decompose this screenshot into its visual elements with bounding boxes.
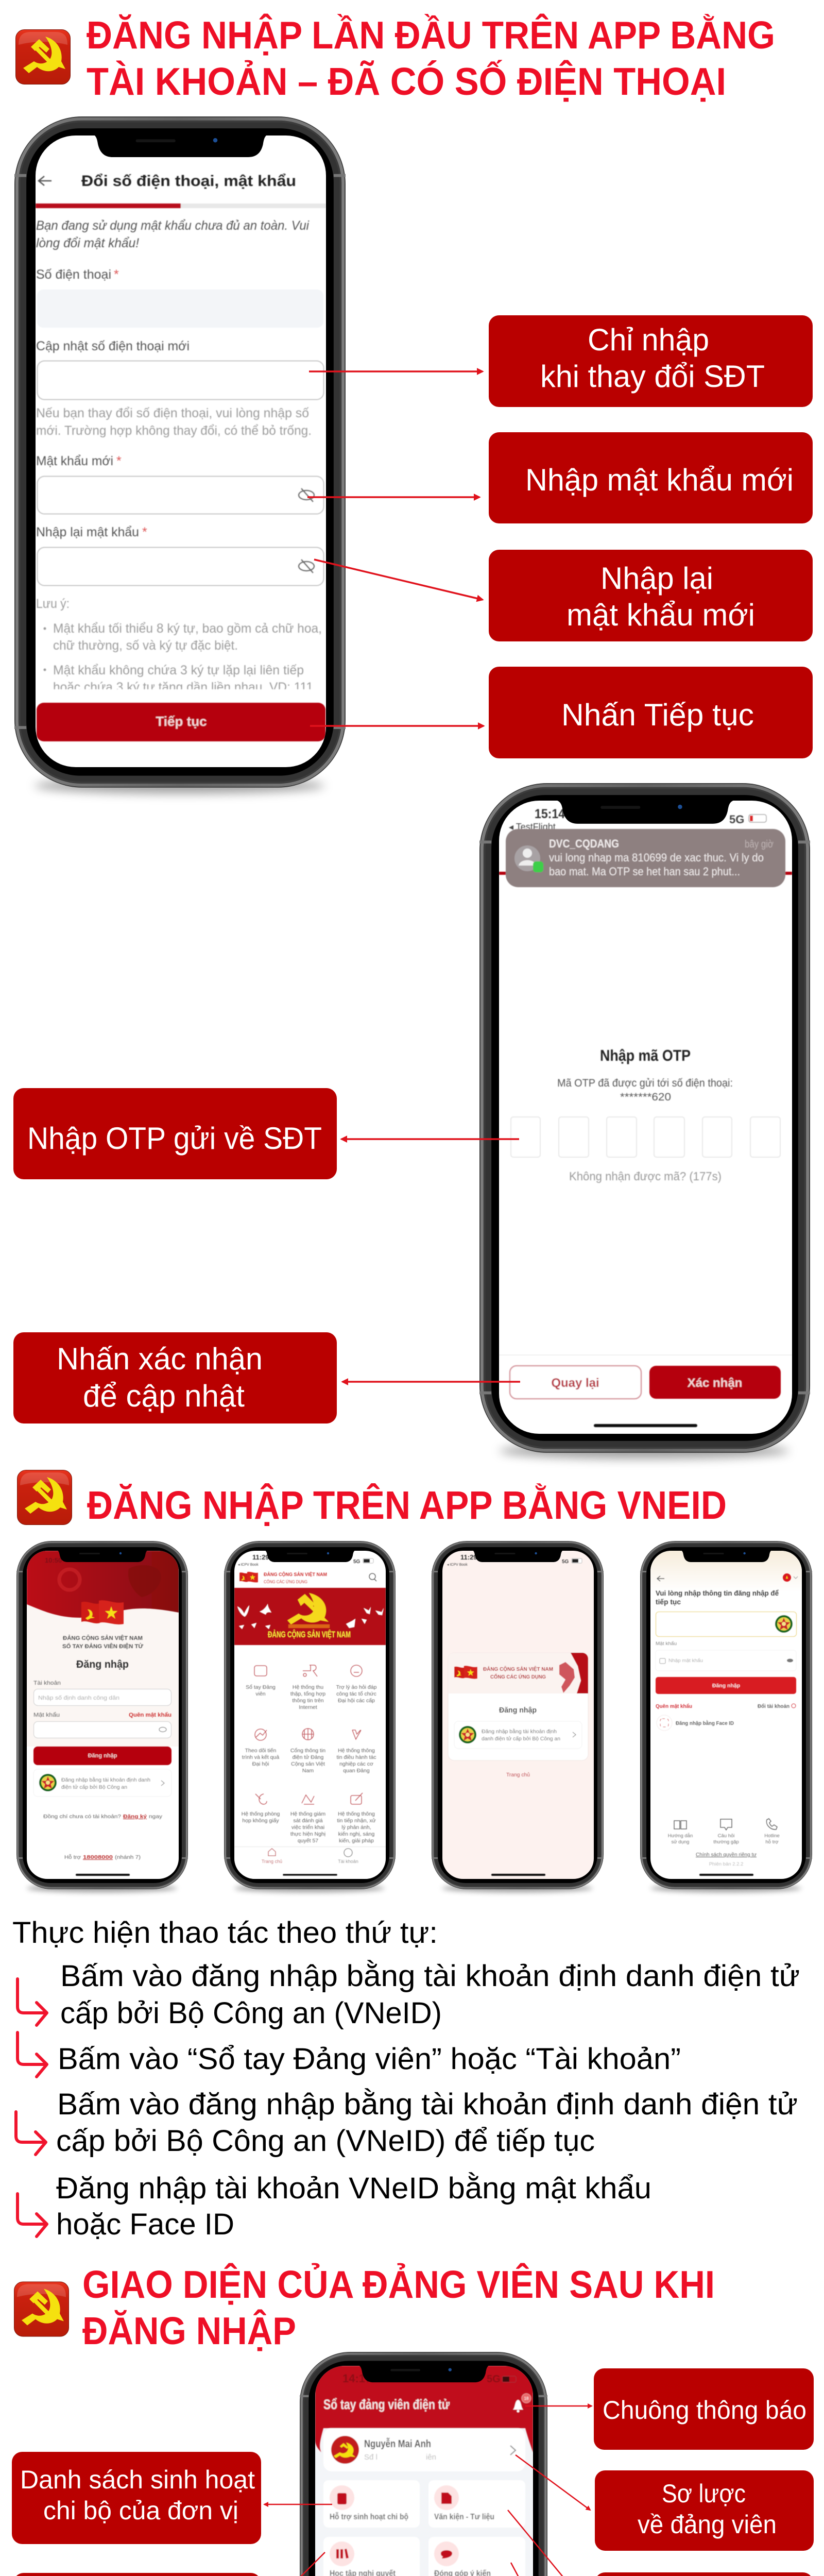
sign-up prompt: Đăng ký xyxy=(123,1814,147,1820)
step 3: cấp bởi Bộ Công an (VNeID) để tiếp tục xyxy=(56,2124,595,2158)
menu grid labels: họp không giấy xyxy=(242,1818,279,1824)
VNeID login row: Đăng nhập bằng tài khoản định danh xyxy=(61,1776,150,1783)
security notice: lòng đổi mật khẩu! xyxy=(36,236,139,250)
icon: notification bell: 18 xyxy=(524,2396,529,2401)
menu grid labels: tin điều hành tác xyxy=(336,1754,376,1760)
arrow: to repeat password callout xyxy=(314,560,483,600)
menu grid labels: quan Đảng xyxy=(343,1768,370,1774)
status bar: 15:14 xyxy=(535,807,565,821)
icon: party emblem xyxy=(15,30,70,84)
portal header: ĐẢNG CỘNG SẢN VIỆT NAM xyxy=(264,1571,327,1578)
phone: VNeID credentials screen xyxy=(640,1541,812,1892)
field: phone number xyxy=(36,267,323,328)
divider xyxy=(499,1354,792,1355)
arrow: to new password callout xyxy=(307,496,479,498)
status bar: 5G xyxy=(353,1559,360,1565)
step 3 xyxy=(16,2088,798,2158)
login card: CỔNG CÁC ỨNG DỤNG xyxy=(490,1673,546,1680)
arrow: to confirm callout xyxy=(342,1381,520,1383)
tile: branch activities: Hỗ trợ sinh hoạt chi bộ xyxy=(330,2513,408,2521)
icon: contact avatar xyxy=(514,845,543,872)
callout: confirm update xyxy=(13,1332,337,1423)
login card: Đăng nhập xyxy=(499,1706,537,1715)
form heading: tiếp tục xyxy=(656,1598,681,1606)
red banner xyxy=(234,1588,386,1645)
privacy and version: Chính sách quyền riêng tư xyxy=(696,1852,757,1858)
member card: Nguyễn Mai Anh xyxy=(364,2437,431,2450)
login card: danh điện tử cấp bởi Bộ Công an xyxy=(482,1736,560,1742)
step 4: hoặc Face ID xyxy=(56,2208,234,2241)
menu grid labels: nghiệp các cơ xyxy=(339,1761,373,1767)
security notice xyxy=(36,218,310,250)
field: new password xyxy=(36,454,323,514)
callout: party documents xyxy=(595,2572,813,2576)
tile: documents xyxy=(428,2480,525,2528)
phone: app portal screen xyxy=(224,1541,396,1892)
field: phone number: Số điện thoại xyxy=(36,267,111,282)
status bar xyxy=(238,1553,373,1567)
OTP description: Mã OTP đã được gửi tới số điện thoại: xyxy=(557,1077,733,1089)
field: repeat password: * xyxy=(142,525,147,539)
member card: Sđ l xyxy=(364,2453,377,2462)
icon: party emblem xyxy=(14,2282,69,2336)
status bar: 5G xyxy=(729,813,744,826)
menu grid labels: thập, tổng hợp xyxy=(290,1691,325,1697)
bottom tab bar xyxy=(234,1846,386,1879)
callout: resolution study list xyxy=(13,2573,261,2576)
home indicator xyxy=(283,1874,337,1876)
screen title: Sổ tay đảng viên điện tử xyxy=(323,2397,450,2412)
button: back xyxy=(510,1366,641,1399)
login button xyxy=(33,1747,171,1765)
red wave header xyxy=(27,1551,179,1618)
password field xyxy=(33,1712,171,1738)
arrow: documents xyxy=(508,2510,591,2576)
button: back: Quay lại xyxy=(551,1376,599,1390)
home link: Trang chủ xyxy=(506,1772,530,1778)
section heading: first login xyxy=(15,13,775,103)
step 4: Đăng nhập tài khoản VNeID bằng mật khẩu xyxy=(56,2172,651,2205)
button: confirm xyxy=(649,1366,781,1399)
login card xyxy=(448,1653,588,1760)
icon: notification bell xyxy=(513,2394,531,2412)
menu grid labels: kiến nghị, sáng xyxy=(338,1831,374,1837)
status bar: 5G xyxy=(487,2374,501,2385)
menu grid labels: Hệ thống thu xyxy=(293,1684,323,1690)
icon: step arrow xyxy=(18,1979,47,2025)
screen content xyxy=(315,2366,533,2576)
Face ID login: Đăng nhập bằng Face ID xyxy=(676,1720,734,1726)
callout: enter OTP xyxy=(13,1088,337,1179)
portal header: CỔNG CÁC ỨNG DỤNG xyxy=(264,1580,307,1584)
status bar xyxy=(342,2372,516,2385)
icon: step arrow xyxy=(16,2112,46,2155)
app name: SỔ TAY ĐẢNG VIÊN ĐIỆN TỬ xyxy=(62,1643,144,1650)
step 2 xyxy=(18,2032,681,2077)
field: repeat password: Nhập lại mật khẩu xyxy=(36,525,139,539)
screen content xyxy=(650,1551,802,1879)
login button xyxy=(656,1677,796,1694)
menu grid labels: Theo dõi tiến xyxy=(245,1748,276,1754)
sign-up prompt: Đồng chí chưa có tài khoản? xyxy=(43,1814,121,1820)
menu grid labels: công tác tổ chức xyxy=(336,1691,376,1697)
step 1: Bấm vào đăng nhập bằng tài khoản định danh điện tử xyxy=(60,1959,800,1993)
OTP input boxes xyxy=(511,1117,780,1157)
bottom tab bar: Trang chủ xyxy=(262,1859,282,1864)
menu grid labels: Nam xyxy=(302,1768,314,1774)
notes: Mật khẩu tối thiểu 8 ký tự, bao gồm cả chữ hoa, xyxy=(53,621,322,636)
help links: thường gặp xyxy=(713,1839,739,1845)
step 4 xyxy=(18,2172,651,2241)
phone: member home screen xyxy=(300,2352,547,2576)
menu grid labels: điện tử Đảng xyxy=(293,1754,324,1760)
menu grid labels: việc triển khai xyxy=(291,1824,324,1831)
menu grid labels: Đại hội xyxy=(252,1761,269,1767)
callout: repeat password xyxy=(489,550,813,641)
screen content xyxy=(27,1551,179,1879)
title line 2: TÀI KHOẢN – ĐÃ CÓ SỐ ĐIỆN THOẠI xyxy=(87,60,726,103)
password input xyxy=(656,1641,796,1671)
screen content xyxy=(499,801,792,1434)
helper text: mới. Trường hợp không thay đổi, có thể bỏ trống. xyxy=(36,423,312,438)
OTP heading: Nhập mã OTP xyxy=(600,1046,691,1064)
helper text: Nếu bạn thay đổi số điện thoại, vui lòng nhập số xyxy=(36,406,309,420)
red header xyxy=(315,2366,533,2452)
menu grid labels: lý phản ánh, xyxy=(341,1824,371,1831)
account field xyxy=(33,1680,171,1705)
password field: Mật khẩu xyxy=(33,1712,60,1718)
title: ĐĂNG NHẬP TRÊN APP BẰNG VNEID xyxy=(87,1483,727,1528)
tile: resolutions xyxy=(323,2537,420,2576)
status bar: ◂ ICPV Book xyxy=(447,1563,468,1567)
arrow: resolutions xyxy=(264,2552,325,2576)
home indicator xyxy=(699,1874,753,1876)
callout: branch activity list: Danh sách sinh hoạt xyxy=(20,2465,255,2494)
app name xyxy=(62,1635,144,1650)
help links: Hướng dẫn xyxy=(668,1833,693,1839)
callout: new phone number xyxy=(489,315,813,407)
faint emblem and portrait xyxy=(59,1565,161,1597)
security notice: Bạn đang sử dụng mật khẩu chưa đủ an toàn. Vui xyxy=(36,218,310,233)
menu grid labels: kiến, giải pháp xyxy=(339,1838,374,1844)
tile: documents: Văn kiện - Tư liệu xyxy=(434,2513,494,2521)
forgot password and switch account: Quên mật khẩu xyxy=(656,1703,692,1709)
banner title: ĐẢNG CỘNG SẢN VIỆT NAM xyxy=(268,1630,351,1639)
member card: iên xyxy=(426,2453,436,2462)
login button: Đăng nhập xyxy=(712,1683,740,1689)
field: repeat password xyxy=(36,525,323,585)
login heading: Đăng nhập xyxy=(76,1659,129,1670)
icon: back arrow xyxy=(39,176,52,185)
help links xyxy=(668,1819,780,1845)
support line: (nhánh 7) xyxy=(115,1854,141,1860)
field: new password: Mật khẩu mới xyxy=(36,454,113,468)
phone: handbook login screen xyxy=(432,1541,604,1892)
screen content xyxy=(36,135,326,767)
menu grid labels: sát đánh giá xyxy=(293,1818,323,1824)
arrow: member profile xyxy=(516,2455,590,2510)
section heading: member interface xyxy=(14,2263,715,2352)
callout: notification bell xyxy=(594,2368,814,2450)
Face ID login xyxy=(657,1715,734,1731)
login card: Đăng nhập bằng tài khoản định xyxy=(482,1728,557,1735)
form heading xyxy=(656,1589,779,1606)
menu grid labels: tin tiếp nhận, xử xyxy=(337,1818,376,1824)
phone: OTP screen xyxy=(479,783,810,1459)
menu grid labels: Trợ lý ảo hỏi đáp xyxy=(336,1684,376,1690)
account field: Tài khoản xyxy=(33,1680,61,1686)
step 3: Bấm vào đăng nhập bằng tài khoản định danh điện tử xyxy=(57,2088,798,2121)
account input xyxy=(656,1612,796,1636)
arrow: bell xyxy=(525,2405,592,2406)
phone: login screen xyxy=(16,1541,188,1892)
arrow: to continue callout xyxy=(310,725,484,727)
status bar: 11:29 xyxy=(460,1553,477,1561)
login button: Đăng nhập xyxy=(88,1753,117,1759)
menu grid labels: viên xyxy=(255,1691,266,1697)
OTP description: *******620 xyxy=(620,1091,671,1103)
menu grid labels: Đại hội các cấp xyxy=(338,1698,375,1704)
OTP description xyxy=(557,1077,733,1103)
portal header xyxy=(239,1571,376,1584)
notification card: vui long nhap ma 810699 de xac thuc. Vi ly do xyxy=(549,851,764,864)
title line 1: ĐĂNG NHẬP LẦN ĐẦU TRÊN APP BẰNG xyxy=(87,13,775,57)
arrow: to new phone callout xyxy=(309,370,483,372)
privacy and version xyxy=(696,1852,757,1867)
status bar: ◂ TestFlight xyxy=(509,822,556,832)
callout: press continue xyxy=(489,667,813,758)
tile: feedback xyxy=(428,2537,525,2576)
field: new phone number xyxy=(36,339,323,400)
menu grid labels xyxy=(242,1684,377,1844)
button: confirm: Xác nhận xyxy=(688,1376,742,1390)
notes: Lưu ý: xyxy=(36,597,70,611)
home indicator xyxy=(76,1874,130,1876)
field: new phone number: Cập nhật số điện thoại mới xyxy=(36,339,190,353)
callout: confirm update: Nhấn xác nhận xyxy=(57,1342,263,1376)
callout: new password: Nhập mật khẩu mới xyxy=(525,463,794,497)
help links: sử dụng xyxy=(672,1839,689,1845)
notes: chữ thường, số và ký tự đặc biệt. xyxy=(53,638,238,653)
sign-up prompt: ngay xyxy=(149,1814,163,1820)
app name: ĐẢNG CỘNG SẢN VIỆT NAM xyxy=(63,1635,143,1641)
callout: confirm update: để cập nhật xyxy=(83,1379,245,1413)
card banner xyxy=(448,1653,588,1693)
status bar: 5G xyxy=(562,1559,569,1565)
callout: repeat password: mật khẩu mới xyxy=(566,598,755,632)
section heading: VNeID login xyxy=(18,1470,727,1528)
menu grid labels: Hệ thống phòng xyxy=(242,1811,280,1817)
menu grid labels: Hệ thống giám xyxy=(290,1811,325,1817)
arrow: branch activities xyxy=(264,2504,332,2505)
menu grid labels: thông tin trên xyxy=(292,1698,324,1704)
menu grid labels: thực hiện Nghị xyxy=(290,1831,325,1837)
helper text xyxy=(36,406,312,438)
flags xyxy=(81,1600,124,1624)
field: phone number: * xyxy=(114,267,119,282)
notification card xyxy=(506,829,785,887)
callout: member profile: về đảng viên xyxy=(638,2510,777,2539)
birds xyxy=(237,1604,384,1629)
form heading: Vui lòng nhập thông tin đăng nhập để xyxy=(656,1589,779,1597)
help links: hỗ trợ xyxy=(765,1839,779,1845)
screen content xyxy=(442,1551,594,1879)
callout: enter OTP: Nhập OTP gửi về SĐT xyxy=(27,1121,322,1156)
icon: party emblem xyxy=(18,1470,72,1525)
callout: new password xyxy=(489,432,813,523)
password input: Mật khẩu xyxy=(656,1641,677,1647)
tile: branch activities xyxy=(323,2480,420,2528)
callout: notification bell: Chuông thông báo xyxy=(603,2396,806,2425)
screen content xyxy=(234,1551,386,1879)
back arrow and language flag xyxy=(657,1573,798,1582)
button: continue: Tiếp tục xyxy=(156,714,207,729)
VNeID login row: điện tử cấp bởi Bộ Công an xyxy=(61,1784,127,1790)
phone: change phone number and password screen xyxy=(14,116,346,793)
help links: Hotline xyxy=(764,1833,780,1839)
callout: new phone number: khi thay đổi SĐT xyxy=(540,359,765,394)
menu grid labels: trình và kết quả xyxy=(242,1754,279,1760)
screen title: Đổi số điện thoại, mật khẩu xyxy=(81,173,296,190)
support line xyxy=(64,1854,141,1860)
callout: member profile xyxy=(595,2470,814,2551)
icon: step arrow xyxy=(18,2032,47,2077)
notes: Mật khẩu không chứa 3 ký tự lặp lại liên tiếp xyxy=(53,663,304,677)
arrow: to OTP callout xyxy=(341,1138,519,1140)
step 1 xyxy=(18,1959,800,2030)
instructions intro: Thực hiện thao tác theo thứ tự: xyxy=(12,1916,438,1950)
status bar: 14:17 xyxy=(342,2372,371,2385)
sign-up prompt xyxy=(43,1814,163,1820)
support line: 18008000 xyxy=(83,1854,113,1860)
VNeID login row xyxy=(33,1769,171,1797)
notes: hoặc chứa 3 ký tự tăng dần liền nhau. VD: 111 xyxy=(53,680,313,694)
status bar xyxy=(509,808,767,831)
privacy and version: Phiên bản 2.2.2 xyxy=(709,1861,743,1867)
title line 1: GIAO DIỆN CỦA ĐẢNG VIÊN SAU KHI xyxy=(82,2263,715,2306)
status bar: 11:29 xyxy=(252,1553,269,1561)
progress bar xyxy=(36,204,326,208)
help links: Câu hỏi xyxy=(718,1833,734,1839)
resend countdown: Không nhận được mã? (177s) xyxy=(569,1170,722,1183)
callout: branch activity list: chi bộ của đơn vị xyxy=(43,2496,238,2525)
home indicator xyxy=(491,1874,545,1876)
account field: Nhập số định danh công dân xyxy=(38,1695,119,1701)
status bar: ◂ ICPV Book xyxy=(238,1563,259,1567)
title line 2: ĐĂNG NHẬP xyxy=(82,2309,296,2352)
callout: branch activity list xyxy=(12,2452,261,2544)
password input: Nhập mật khẩu xyxy=(668,1658,703,1664)
menu grid labels: Sổ tay Đảng xyxy=(246,1684,276,1690)
forgot password and switch account xyxy=(656,1703,796,1709)
menu grid labels: Cổng thông tin xyxy=(290,1748,325,1754)
callout: repeat password: Nhập lại xyxy=(600,561,713,596)
callout: new phone number: Chỉ nhập xyxy=(588,323,709,357)
member card xyxy=(323,2428,525,2471)
login card: ĐẢNG CỘNG SẢN VIỆT NAM xyxy=(483,1666,553,1672)
notification card: bao mat. Ma OTP se het han sau 2 phut... xyxy=(549,865,740,878)
notes xyxy=(36,597,326,694)
step 1: cấp bởi Bộ Công an (VNeID) xyxy=(60,1996,442,2030)
callout: member profile: Sơ lược xyxy=(662,2479,746,2508)
menu grid icons xyxy=(254,1665,363,1804)
bottom tab bar: Tài khoản xyxy=(338,1859,358,1864)
field: new password: * xyxy=(116,454,122,468)
menu grid labels: Cộng sản Việt xyxy=(291,1761,325,1767)
notification card: DVC_CQDANG xyxy=(549,837,619,850)
menu grid labels: Hệ thống thông xyxy=(338,1811,375,1817)
status time: 10:50 xyxy=(45,1556,62,1564)
password field: Quên mật khẩu xyxy=(129,1712,171,1718)
support line: Hỗ trợ xyxy=(64,1854,81,1860)
icon: step arrow xyxy=(18,2194,47,2236)
step 2: Bấm vào “Sổ tay Đảng viên” hoặc “Tài khoản” xyxy=(58,2042,681,2076)
red stripe behind notification xyxy=(499,872,792,875)
forgot password and switch account: Đổi tài khoản xyxy=(758,1703,789,1709)
arrow: feedback xyxy=(511,2563,590,2576)
status bar xyxy=(447,1553,582,1567)
button: continue xyxy=(37,703,325,741)
menu grid labels: Hệ thống thông xyxy=(338,1748,375,1754)
menu grid labels: quyết 57 xyxy=(298,1838,318,1844)
home indicator xyxy=(594,1424,697,1427)
callout: press continue: Nhấn Tiếp tục xyxy=(561,698,754,732)
menu grid labels: Internet xyxy=(299,1704,317,1710)
notification card: bây giờ xyxy=(745,839,774,850)
